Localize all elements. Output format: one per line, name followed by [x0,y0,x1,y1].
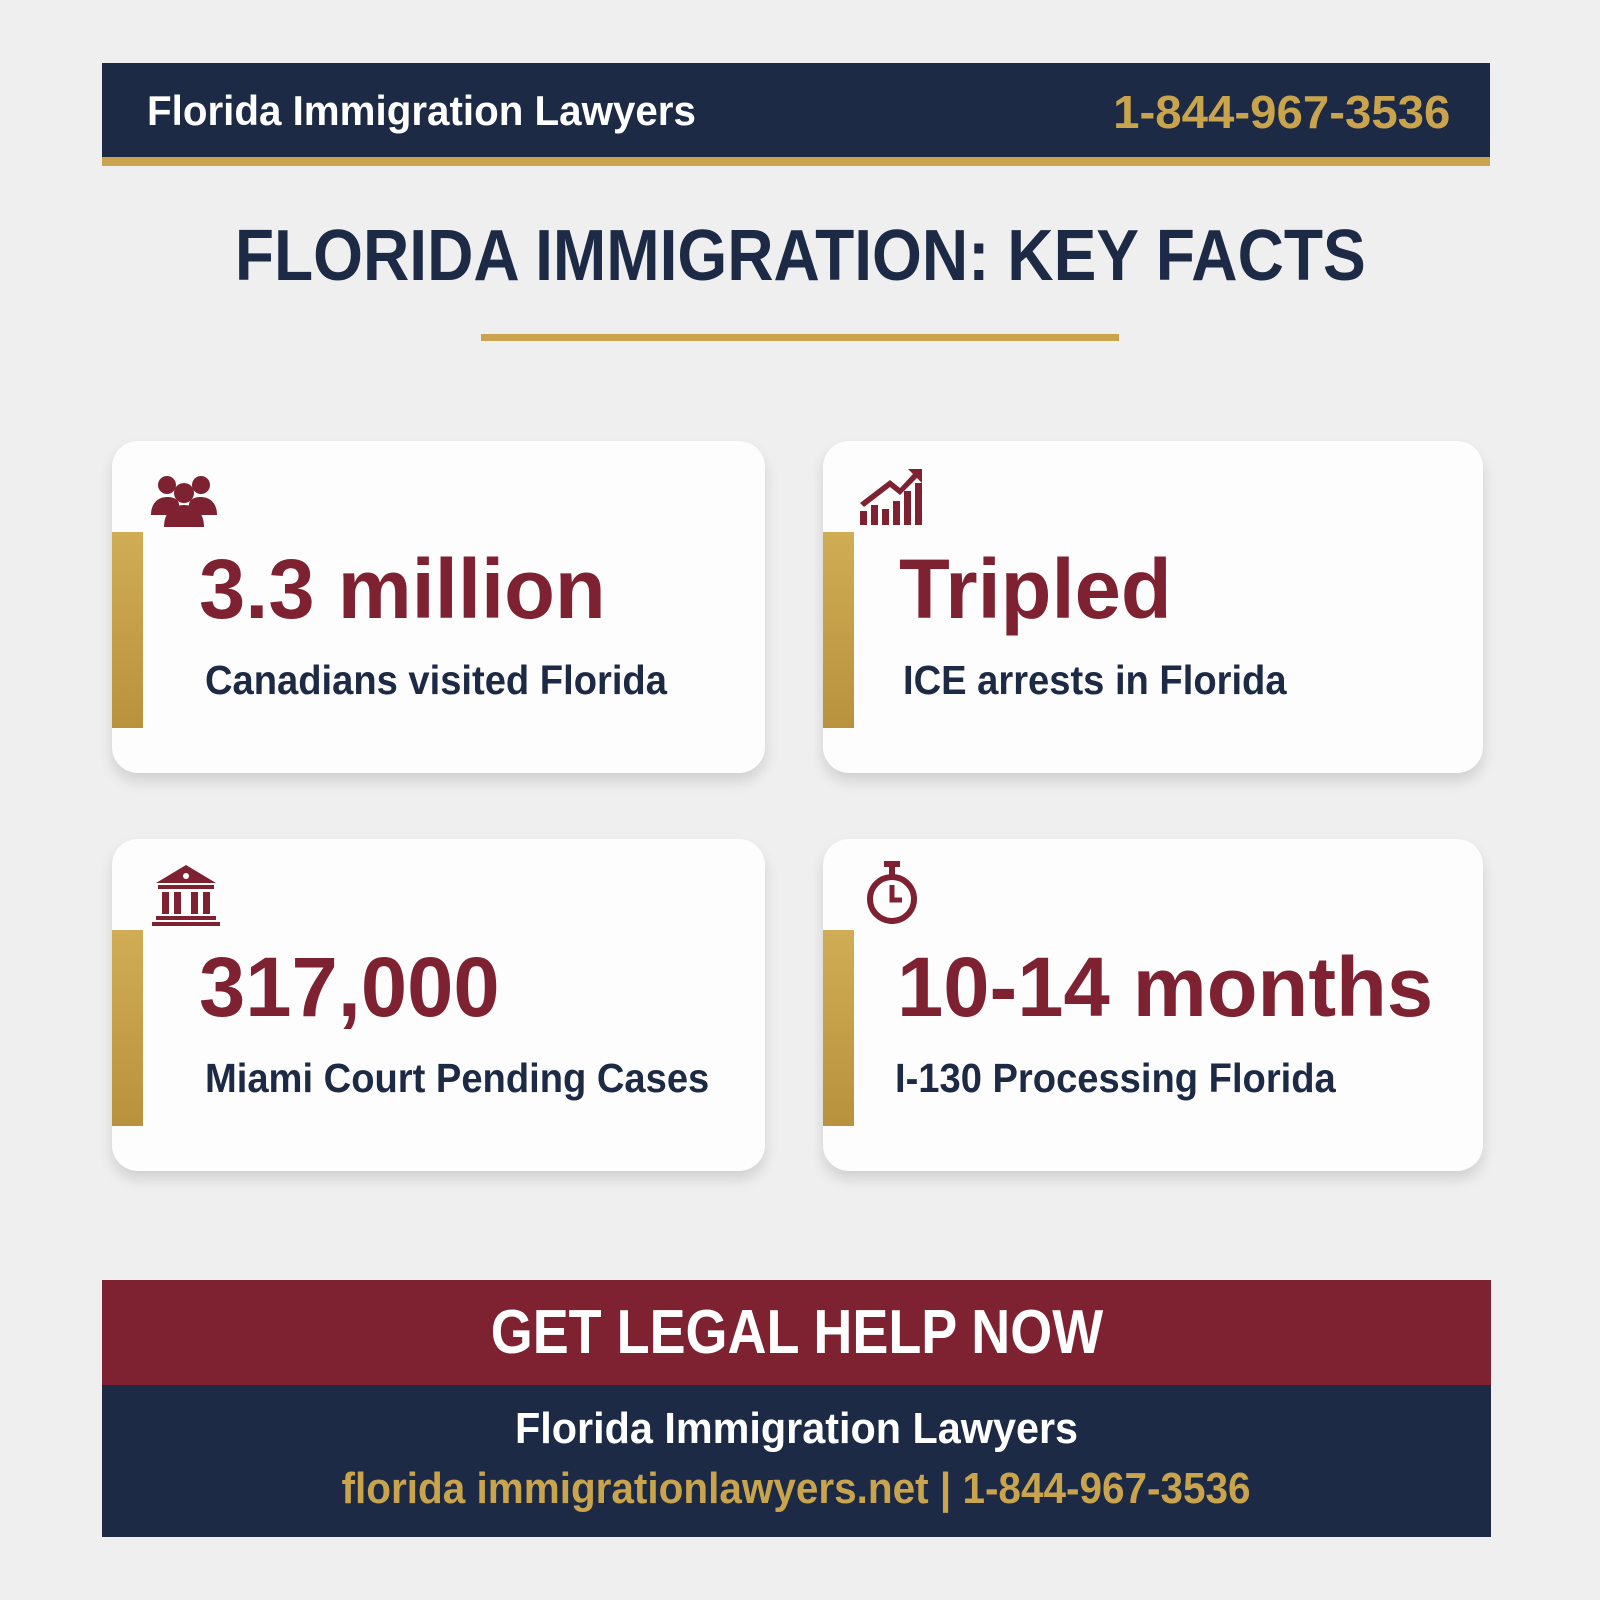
CTA website and phone: florida immigrationlawyers.net | 1-844-967-3536 [342,1464,1251,1513]
card: ICE arrests [823,441,1483,773]
CTA heading [102,1280,1491,1385]
icon: growth chart [860,469,922,525]
stat label: Canadians visited Florida [205,657,667,703]
stat number: 10-14 months [897,940,1433,1034]
title: FLORIDA IMMIGRATION: KEY FACTS [235,216,1365,296]
CTA heading: GET LEGAL HELP NOW [490,1298,1103,1367]
card: I-130 processing [823,839,1483,1171]
stat number: Tripled [899,542,1172,636]
title underline [481,334,1119,341]
header bar [102,63,1490,166]
header firm name: Florida Immigration Lawyers [147,87,696,134]
icon: stopwatch [867,861,917,924]
stat label: ICE arrests in Florida [903,657,1287,703]
CTA contact block [102,1385,1491,1537]
card: Miami court [112,839,765,1171]
header phone: 1-844-967-3536 [1113,86,1450,138]
CTA firm name: Florida Immigration Lawyers [515,1404,1078,1453]
icon: people [151,476,217,527]
card: canadians [112,441,765,773]
icon: courthouse [152,865,220,926]
stat label: Miami Court Pending Cases [205,1055,709,1101]
stat number: 3.3 million [199,542,606,636]
stat number: 317,000 [199,940,500,1034]
call to action banner [102,1280,1491,1537]
stat label: I-130 Processing Florida [895,1055,1336,1101]
